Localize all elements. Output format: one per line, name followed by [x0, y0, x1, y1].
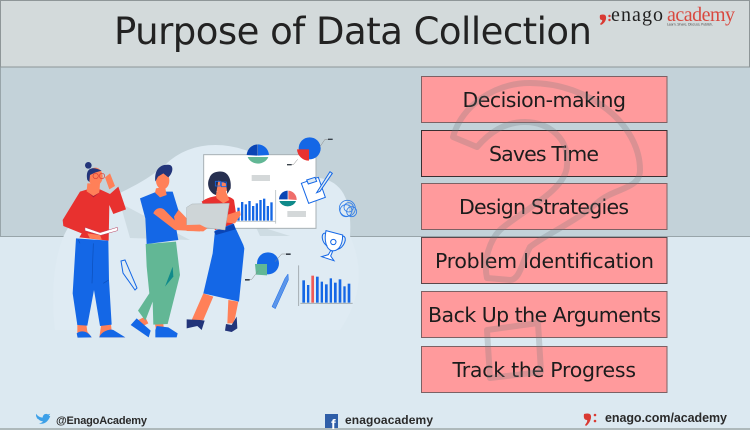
enago academy logo [600, 4, 735, 26]
list panel: purposes [422, 76, 667, 392]
item: design strategies [422, 184, 667, 230]
item: design strategies: Design Strategies [459, 195, 629, 219]
pie: top centre [247, 144, 269, 164]
chart board [204, 137, 357, 309]
person: blue shirt green trousers [131, 165, 200, 337]
enago academy logo: enago [611, 4, 663, 26]
item: back up the arguments [422, 292, 667, 338]
board bar chart [237, 199, 273, 221]
background blob [53, 145, 359, 330]
icon: scribble [339, 200, 357, 217]
item: saves time: Saves Time [489, 142, 599, 166]
item: decision-making [422, 76, 667, 122]
item: track the progress [422, 346, 667, 392]
enago academy logo: Learn. Share. Discuss. Publish. [667, 22, 713, 26]
person: blue skirt with laptop [187, 171, 244, 332]
pie: small on board [279, 191, 297, 206]
item: back up the arguments: Back Up the Arguments [428, 303, 661, 327]
title: Purpose of Data Collection [114, 10, 592, 53]
enago academy logo: academy [667, 4, 735, 26]
item: saves time [422, 130, 667, 176]
item: problem identification: Problem Identification [435, 249, 654, 273]
person: red sweater with book [63, 162, 126, 338]
lower bar chart [299, 265, 353, 306]
facebook page [325, 413, 433, 430]
footer: social links [36, 411, 727, 430]
icon: pencil [272, 274, 288, 309]
icon: trophy [322, 231, 345, 261]
header band [0, 0, 750, 67]
item: decision-making: Decision-making [462, 88, 626, 112]
icon: clipboard [301, 172, 332, 203]
icon: pen [121, 260, 137, 290]
website: enago.com/academy [605, 411, 727, 425]
pie: top right [287, 137, 333, 165]
item: problem identification [422, 238, 667, 284]
watermark: question mark [453, 83, 640, 378]
item: track the progress: Track the Progress [452, 358, 636, 382]
twitter handle: @EnagoAcademy [56, 415, 148, 427]
pie: lower [245, 252, 291, 281]
board text lines [252, 176, 306, 216]
facebook page: enagoacademy [345, 413, 433, 427]
illustration: team reviewing data [53, 137, 359, 338]
